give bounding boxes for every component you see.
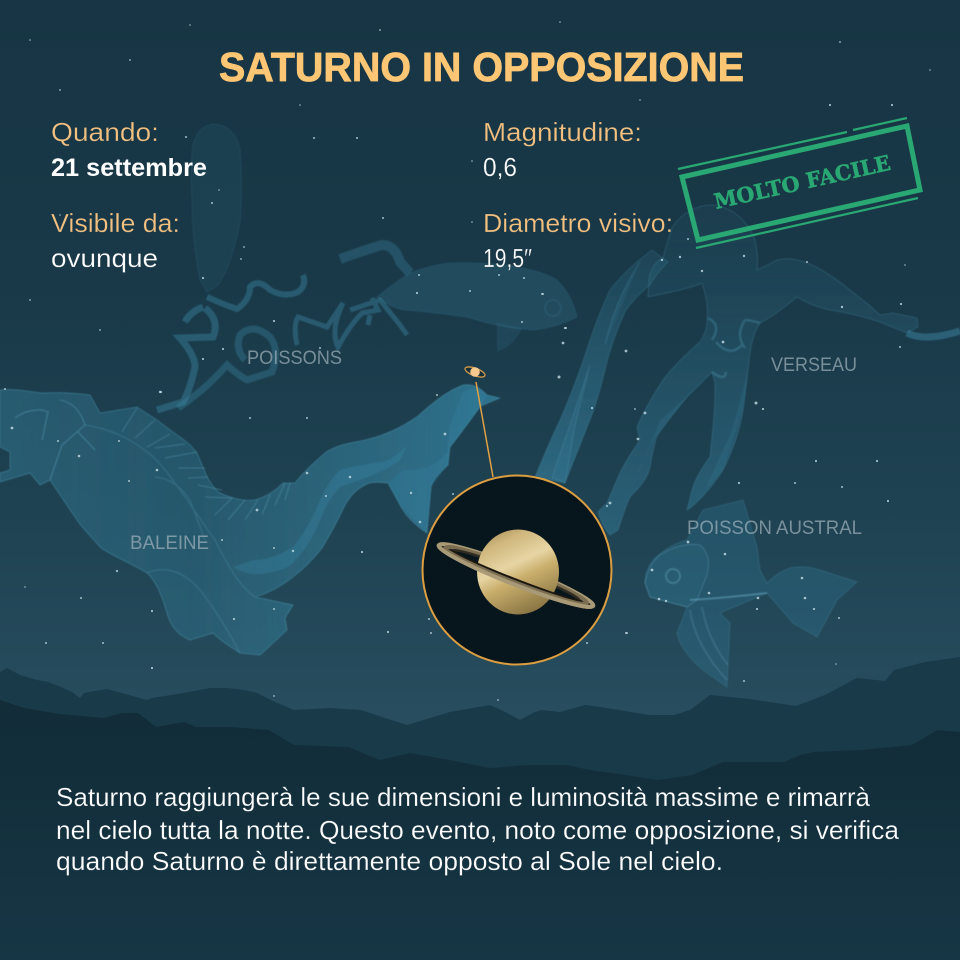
leader line from small Saturn to magnified view: [476, 382, 493, 477]
constellation: Baleine (whale): [0, 385, 500, 655]
ring back half: [435, 537, 597, 614]
info block: visibile da: Visibile da:: [51, 208, 180, 238]
whale dorsal ribs: [122, 408, 290, 520]
lower fin rays: [690, 607, 728, 680]
fish body highlight: [645, 544, 708, 607]
ribbon to second fish: [295, 298, 407, 347]
figure leg shading: [625, 370, 748, 500]
ribbon lower loop: [157, 307, 215, 410]
title: SATURNO IN OPPOSIZIONE: [219, 44, 744, 90]
description text: [56, 782, 900, 876]
upper vertical fish: [191, 124, 242, 292]
horizontal fish fin: [497, 323, 522, 352]
whale tail highlight: [388, 389, 487, 533]
constellation: Poisson Austral: [645, 500, 857, 687]
label: Poisson Austral: POISSON AUSTRAL: [687, 518, 862, 539]
whale belly contour: [85, 425, 255, 653]
southern fish fins and body: [645, 500, 857, 687]
magnified Saturn circle: [422, 476, 612, 664]
planet globe: [477, 530, 559, 614]
whale lighter tail band: [233, 445, 407, 574]
info block: magnitudine: 0,6: [483, 152, 517, 182]
whale head contour: [15, 400, 95, 480]
figure torso detail: [708, 318, 760, 377]
figure body: [598, 205, 918, 535]
horizontal fish body: [377, 263, 577, 330]
stream highlight: [552, 262, 640, 483]
description text: Saturno raggiungerà le sue dimensioni e luminosità massime e rimarrà: [56, 782, 871, 812]
info block: diametro visivo: [483, 208, 673, 273]
upper ribbon arm: [340, 245, 410, 273]
back mountain ridge: [0, 657, 960, 800]
info block: quando: [51, 117, 207, 182]
description text: nel cielo tutta la notte. Questo evento, noto come opposizione, si verifica: [56, 815, 900, 845]
star field: [4, 21, 931, 701]
info block: visibile da: [51, 208, 180, 273]
fish eye: [666, 569, 680, 583]
info block: diametro visivo: 19,5′′: [483, 243, 532, 273]
front mountain ridge: [0, 700, 960, 960]
info block: visibile da: ovunque: [51, 243, 158, 273]
stamp: molto facile: MOLTO FACILE: [712, 150, 893, 214]
constellation: Pesci (Pisces): [157, 124, 577, 410]
description text: quando Saturno è direttamente opposto al Sole nel cielo.: [56, 846, 723, 876]
ribbon curl: [178, 329, 276, 408]
info block: diametro visivo: Diametro visivo:: [483, 208, 673, 238]
ribbon right of knot: [207, 275, 304, 309]
info block: magnitudine: Magnitudine:: [483, 117, 642, 147]
ring front half: [436, 544, 596, 609]
label: Verseau: VERSEAU: [771, 355, 857, 376]
horizontal fish eye: [545, 300, 561, 316]
info block: quando: 21 settembre: [51, 154, 207, 182]
water stream: [535, 250, 668, 483]
info block: quando: Quando:: [51, 117, 159, 147]
constellation: Acquario (Aquarius): [535, 205, 960, 535]
label: Baleine: BALEINE: [130, 533, 209, 554]
icon: small Saturn marker: [464, 365, 486, 379]
label: Poissons: POISSONS: [247, 348, 342, 369]
stamp: molto facile: [678, 118, 920, 248]
ribbon at right hand: [907, 331, 960, 337]
info block: magnitudine: [483, 117, 642, 182]
lateral line: [690, 593, 767, 600]
